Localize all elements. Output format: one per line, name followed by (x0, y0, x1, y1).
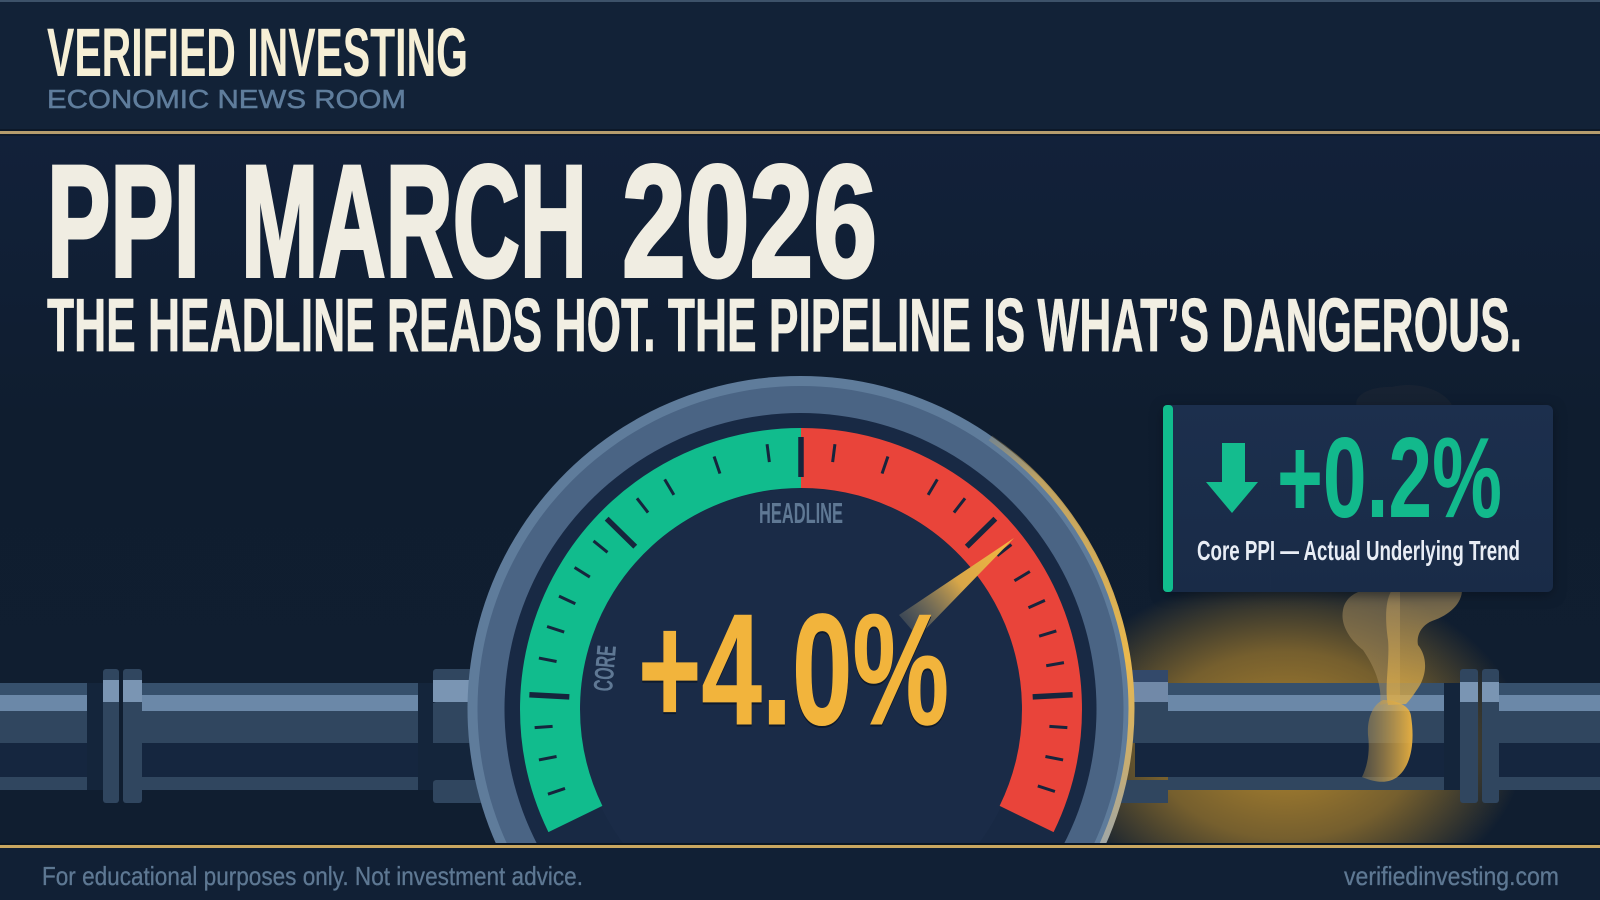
brand subtitle: ECONOMIC NEWS ROOM (47, 84, 406, 114)
label: core: CORE (588, 644, 622, 693)
flange: right double (1460, 669, 1499, 803)
pipe segment: far left (0, 683, 87, 790)
smoke plume (1342, 385, 1462, 782)
pipeline: right with leak (1120, 669, 1600, 803)
card accent bar (1163, 405, 1173, 592)
title: 2026 (622, 132, 877, 310)
gauge (468, 376, 1134, 846)
gauge ring (468, 376, 1134, 846)
pipeline: left (0, 669, 483, 803)
needle (899, 538, 1014, 637)
pipe segment: middle left (142, 683, 418, 790)
flange: at gauge right (1120, 670, 1168, 803)
pipe segment: far right (1499, 683, 1600, 790)
green arc (550, 458, 801, 819)
callout card: core PPI (1163, 405, 1553, 592)
gauge face (579, 489, 1023, 846)
gauge value: +4.0% (638, 582, 949, 758)
footer website: verifiedinvesting.com (1344, 861, 1559, 891)
title: PPI (47, 132, 200, 310)
label: headline: HEADLINE (759, 498, 843, 530)
footer band (0, 843, 1600, 900)
icon: down arrow (1206, 443, 1258, 513)
red arc (801, 458, 1052, 819)
card value: +0.2% (1277, 415, 1502, 542)
header band (0, 0, 1600, 136)
main background (0, 134, 1600, 846)
brand name: VERIFIED INVESTING (47, 14, 468, 91)
title: MARCH (241, 132, 587, 310)
footer disclaimer: For educational purposes only. Not investment advice. (42, 861, 583, 891)
pipe segment: middle right (1135, 683, 1444, 790)
flange: left double (103, 669, 142, 803)
leak glow (1045, 575, 1525, 846)
flange: at gauge left (433, 669, 483, 803)
gauge ticks (529, 437, 1073, 794)
